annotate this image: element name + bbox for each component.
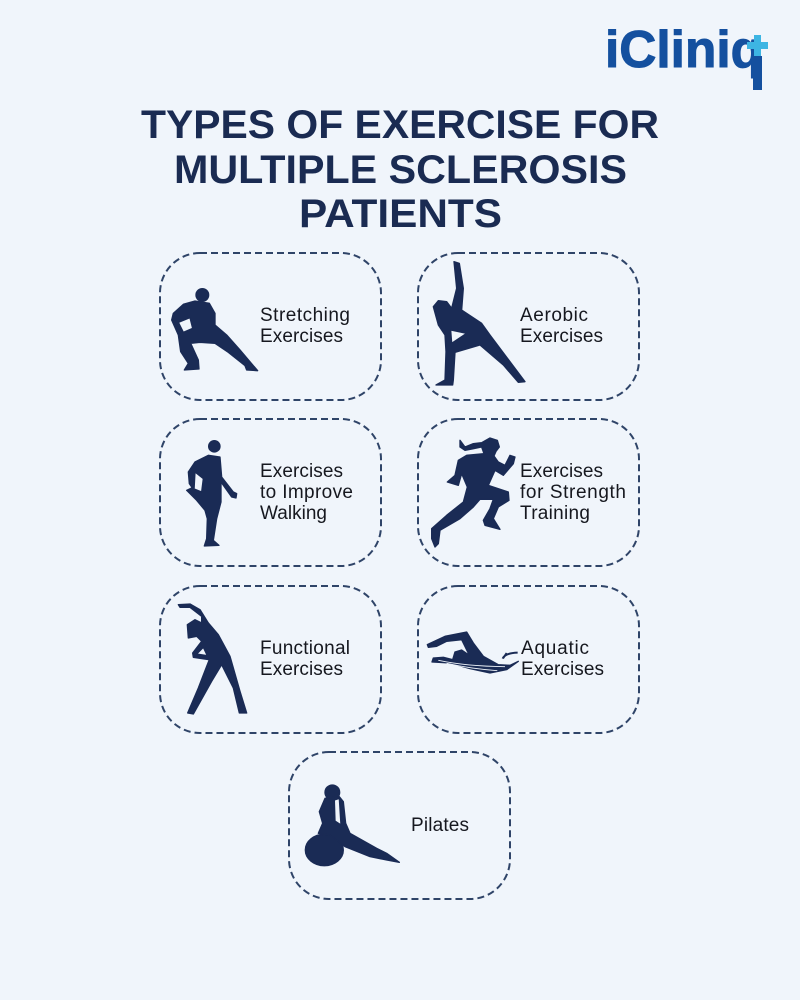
panel: aquatic exercises [418, 586, 639, 733]
title: TYPES OF EXERCISE FOR [141, 103, 659, 147]
label: aquatic: Aquatic [521, 638, 589, 659]
icon: aerobic figure [433, 262, 525, 385]
icon: pilates figure on ball [305, 785, 399, 866]
icon: runner figure [432, 438, 515, 547]
logo: iCliniq: iCliniq [605, 21, 762, 79]
icon: swimmer [427, 632, 518, 673]
label: walking: Walking [260, 503, 327, 524]
panel: stretching exercises [160, 253, 381, 400]
label: aerobic: Exercises [520, 326, 603, 347]
panel: functional exercises [160, 586, 381, 733]
label: stretching: Stretching [260, 305, 350, 326]
icon: walking figure [187, 441, 237, 546]
icon: stretching figure [172, 289, 258, 371]
title: PATIENTS [299, 192, 502, 236]
label: pilates: Pilates [411, 815, 469, 836]
label: strength: Training [520, 503, 590, 524]
title [141, 103, 659, 236]
panel: aerobic exercises [418, 253, 639, 400]
panel: pilates [289, 752, 510, 899]
icon: side bend figure [178, 604, 247, 714]
panel: exercises to improve walking [160, 419, 381, 566]
panel: exercises for strength training [418, 419, 639, 566]
label: walking: to Improve [260, 482, 353, 503]
label: strength: for Strength [520, 482, 626, 503]
label: strength: Exercises [520, 461, 603, 482]
label: functional: Exercises [260, 659, 343, 680]
label: stretching: Exercises [260, 326, 343, 347]
label: aquatic: Exercises [521, 659, 604, 680]
title: MULTIPLE SCLEROSIS [174, 148, 627, 192]
label: aerobic: Aerobic [520, 305, 588, 326]
label: functional: Functional [260, 638, 350, 659]
label: walking: Exercises [260, 461, 343, 482]
